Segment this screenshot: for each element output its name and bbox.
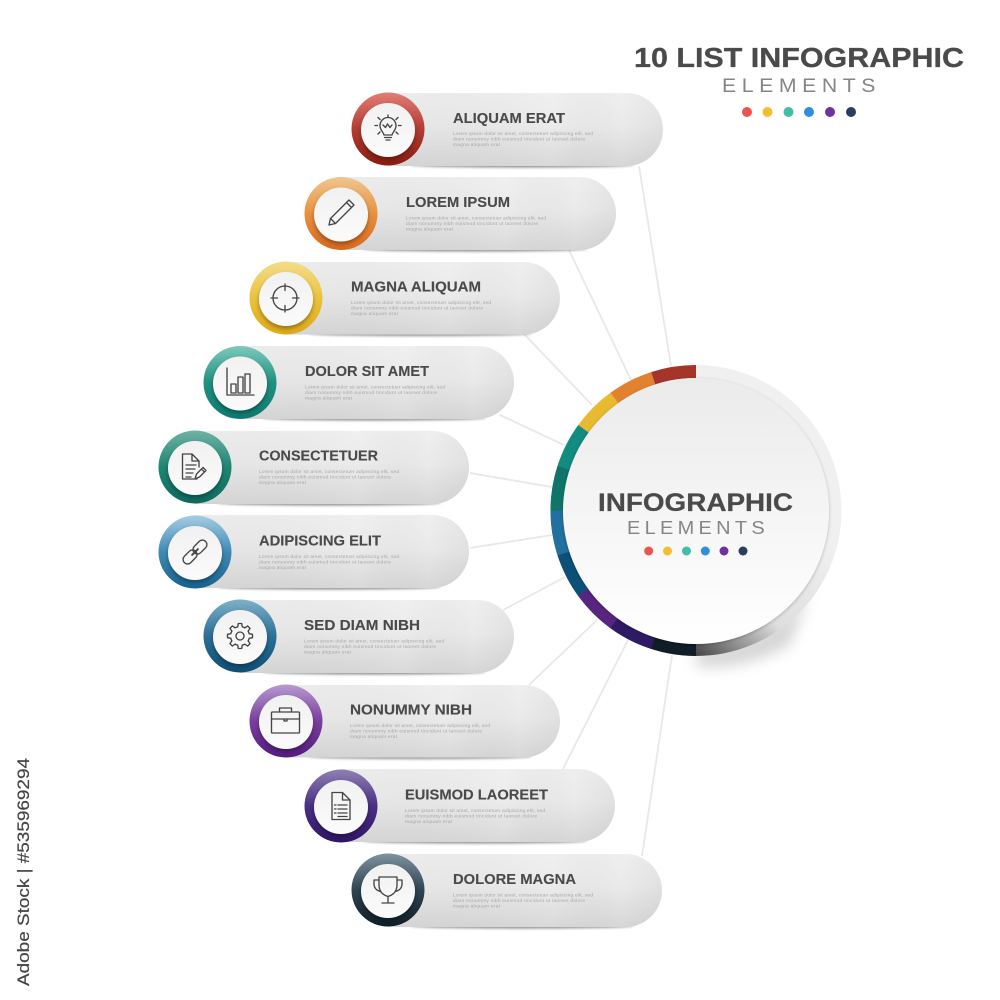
icon: target (271, 284, 299, 312)
item 9: euismod laoreet (304, 769, 615, 844)
item 10: dolore magna: DOLORE MAGNA (453, 872, 577, 888)
item 5: consectetuer: diam nonummy nibh euismod tincidunt ut laoreet dolore (259, 474, 391, 480)
item 7: sed diam nibh: magna aliquam erat (304, 650, 352, 656)
item 3: magna aliquam (250, 262, 560, 336)
colour dots (742, 107, 856, 117)
item 4: dolor sit amet (204, 346, 514, 421)
icon: document (332, 792, 350, 820)
title: 10 LIST INFOGRAPHIC (634, 42, 964, 73)
item 9: euismod laoreet: diam nonummy nibh euismod tincidunt ut laoreet dolore (405, 814, 537, 820)
item 2: lorem ipsum (304, 177, 616, 252)
centre dots (644, 546, 748, 556)
icon: pencil (329, 200, 354, 225)
item 10: dolore magna: diam nonummy nibh euismod tincidunt ut laoreet dolore (453, 898, 585, 904)
item 4: dolor sit amet: magna aliquam erat (305, 396, 353, 402)
item 2: lorem ipsum: magna aliquam erat (406, 226, 454, 232)
item 8: nonummy nibh: diam nonummy nibh euismod tincidunt ut laoreet dolore (350, 728, 482, 734)
item 6: adipiscing elit (158, 515, 469, 590)
item 10: dolore magna: magna aliquam erat (453, 904, 501, 910)
item 2: lorem ipsum: Lorem ipsum dolor sit amet, consectetuer adipiscing elit, sed (406, 216, 546, 222)
subtitle: ELEMENTS (722, 76, 881, 97)
item 4: dolor sit amet: Lorem ipsum dolor sit amet, consectetuer adipiscing elit, sed (305, 384, 445, 390)
item 1: aliquam erat: ALIQUAM ERAT (453, 111, 565, 127)
item 8: nonummy nibh: NONUMMY NIBH (350, 702, 472, 718)
item 6: adipiscing elit: diam nonummy nibh euismod tincidunt ut laoreet dolore (259, 560, 391, 566)
item 10: dolore magna: Lorem ipsum dolor sit amet, consectetuer adipiscing elit, sed (453, 892, 593, 898)
icon: light bulb (375, 115, 401, 140)
centre subheading: ELEMENTS (627, 517, 769, 538)
item 1: aliquam erat (352, 92, 663, 168)
item 8: nonummy nibh (250, 684, 560, 759)
item 5: consectetuer: magna aliquam erat (259, 480, 307, 486)
colour ring segments (557, 372, 696, 650)
icon: bar chart (227, 368, 254, 395)
icon: trophy (374, 877, 402, 903)
backing disc (550, 365, 842, 656)
item 6: adipiscing elit: Lorem ipsum dolor sit amet, consectetuer adipiscing elit, sed (259, 554, 399, 560)
item 6: adipiscing elit: magna aliquam erat (259, 565, 307, 571)
item 8: nonummy nibh: Lorem ipsum dolor sit amet, consectetuer adipiscing elit, sed (350, 723, 490, 729)
item 5: consectetuer: Lorem ipsum dolor sit amet, consectetuer adipiscing elit, sed (259, 469, 399, 475)
item 9: euismod laoreet: Lorem ipsum dolor sit amet, consectetuer adipiscing elit, sed (405, 808, 545, 814)
white disc (563, 378, 829, 644)
title block (634, 42, 964, 117)
item 2: lorem ipsum: LOREM IPSUM (406, 195, 510, 211)
central circle (550, 365, 842, 667)
item 7: sed diam nibh: diam nonummy nibh euismod tincidunt ut laoreet dolore (304, 644, 436, 650)
item 6: adipiscing elit: ADIPISCING ELIT (259, 534, 381, 550)
item 7: sed diam nibh: Lorem ipsum dolor sit amet, consectetuer adipiscing elit, sed (304, 638, 444, 644)
item 4: dolor sit amet: diam nonummy nibh euismod tincidunt ut laoreet dolore (305, 390, 437, 396)
item 5: consectetuer: CONSECTETUER (259, 448, 379, 464)
item 3: magna aliquam: MAGNA ALIQUAM (351, 280, 481, 296)
connector lines (470, 166, 672, 856)
icon: briefcase (272, 708, 300, 733)
centre heading: INFOGRAPHIC (598, 489, 793, 517)
item 9: euismod laoreet: EUISMOD LAOREET (405, 788, 548, 804)
side credit text: Adobe Stock | #535969294 (14, 758, 33, 986)
item 8: nonummy nibh: magna aliquam erat (350, 734, 398, 740)
item 1: aliquam erat: Lorem ipsum dolor sit amet, consectetuer adipiscing elit, sed (453, 131, 593, 137)
disc shadow (696, 590, 810, 667)
item 7: sed diam nibh: SED DIAM NIBH (304, 618, 420, 634)
icon: document with pencil (182, 454, 206, 479)
item 3: magna aliquam: diam nonummy nibh euismod tincidunt ut laoreet dolore (351, 306, 483, 312)
item 3: magna aliquam: Lorem ipsum dolor sit amet, consectetuer adipiscing elit, sed (351, 300, 491, 306)
item 1: aliquam erat: magna aliquam erat (453, 142, 501, 148)
item 5: consectetuer (158, 430, 469, 506)
item 4: dolor sit amet: DOLOR SIT AMET (305, 364, 429, 380)
item 3: magna aliquam: magna aliquam erat (351, 311, 399, 317)
item 10: dolore magna (352, 854, 662, 929)
item 2: lorem ipsum: diam nonummy nibh euismod tincidunt ut laoreet dolore (406, 221, 538, 227)
item 1: aliquam erat: diam nonummy nibh euismod tincidunt ut laoreet dolore (453, 136, 585, 142)
icon: chain link (181, 538, 209, 566)
item 9: euismod laoreet: magna aliquam erat (405, 819, 453, 825)
icon: gear (228, 624, 252, 648)
item 7: sed diam nibh (204, 600, 514, 675)
